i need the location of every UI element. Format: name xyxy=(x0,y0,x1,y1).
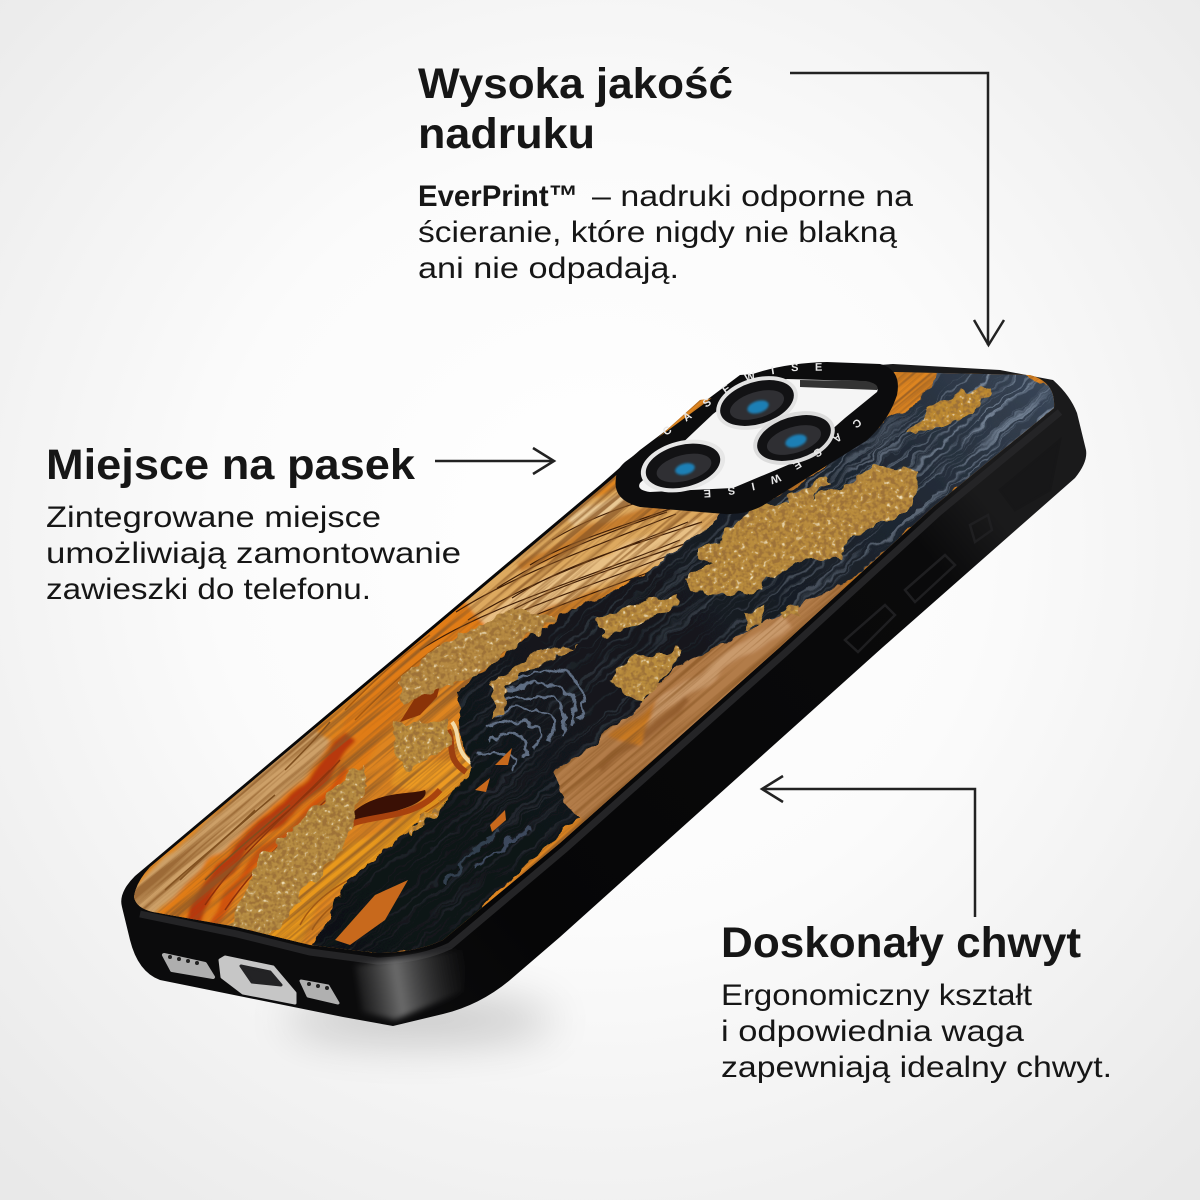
lenses xyxy=(635,367,841,501)
gold patch by swirl xyxy=(393,720,450,773)
description: ani nie odpadają. xyxy=(418,252,679,285)
thin gold strip xyxy=(490,643,575,718)
wood grain lines xyxy=(165,498,707,930)
description: Ergonomiczny kształt xyxy=(721,979,1033,1012)
arrow: to strap slot xyxy=(435,448,554,474)
bumper lip xyxy=(140,412,1060,961)
description xyxy=(418,180,913,285)
inner glass shadow xyxy=(800,380,878,390)
right speaker xyxy=(301,981,338,1003)
small gold patch xyxy=(907,387,992,435)
drop shadow xyxy=(285,998,555,1042)
phone case xyxy=(121,362,1086,1026)
callout: print quality xyxy=(418,60,913,285)
wood base xyxy=(120,360,1070,960)
upper long gold patch xyxy=(400,608,557,703)
corner glare xyxy=(355,948,470,1020)
red-brown knots xyxy=(353,688,471,826)
printed back: wood and resin xyxy=(134,372,1054,953)
resin swirls xyxy=(445,672,585,880)
central gold patch xyxy=(225,763,367,937)
speaker holes xyxy=(168,955,329,990)
wood bands xyxy=(134,488,720,944)
resin texture xyxy=(313,373,1054,952)
arrow: to print surface xyxy=(790,73,1004,345)
camera glass xyxy=(639,379,878,492)
main gold patch xyxy=(685,468,920,593)
right gold patch xyxy=(610,650,680,703)
resin shading xyxy=(312,373,1015,953)
side buttons xyxy=(845,440,1060,652)
small flakes xyxy=(780,605,800,620)
rim wordmarks: CASEWISE xyxy=(704,420,861,498)
arrow: to grip xyxy=(762,776,975,917)
heading: nadruku xyxy=(418,110,595,158)
description: umożliwiają zamontowanie xyxy=(46,537,461,570)
description: – nadruki odporne na xyxy=(592,180,913,213)
description: Zintegrowane miejsce xyxy=(46,501,381,534)
callout: strap slot xyxy=(46,441,461,606)
dark resin xyxy=(312,373,1054,953)
lower light wood xyxy=(554,583,846,822)
callout: grip xyxy=(721,919,1112,1084)
USB port xyxy=(220,957,295,1003)
rim wordmarks: CASEWISE xyxy=(663,363,822,434)
orange flakes xyxy=(335,748,540,945)
heading: Doskonały chwyt xyxy=(721,919,1081,967)
description: EverPrint™ xyxy=(418,180,578,213)
description xyxy=(721,979,1112,1084)
charging port and speakers xyxy=(164,955,338,1003)
description: i odpowiednia waga xyxy=(721,1015,1024,1048)
description xyxy=(46,501,461,606)
description: zapewniają idealny chwyt. xyxy=(721,1051,1112,1084)
camera ring xyxy=(616,362,898,514)
case body xyxy=(121,364,1086,1026)
camera island xyxy=(616,362,898,514)
wood grain texture xyxy=(134,372,1046,952)
gold strip xyxy=(600,593,677,637)
gold flakes on resin xyxy=(225,387,992,937)
left speaker xyxy=(164,955,213,977)
heading xyxy=(418,60,733,158)
rim wordmarks xyxy=(663,363,861,498)
description: zawieszki do telefonu. xyxy=(46,573,371,606)
description: ścieranie, które nigdy nie blakną xyxy=(418,216,897,249)
heading: Wysoka jakość xyxy=(418,60,733,108)
heading: Miejsce na pasek xyxy=(46,441,415,489)
